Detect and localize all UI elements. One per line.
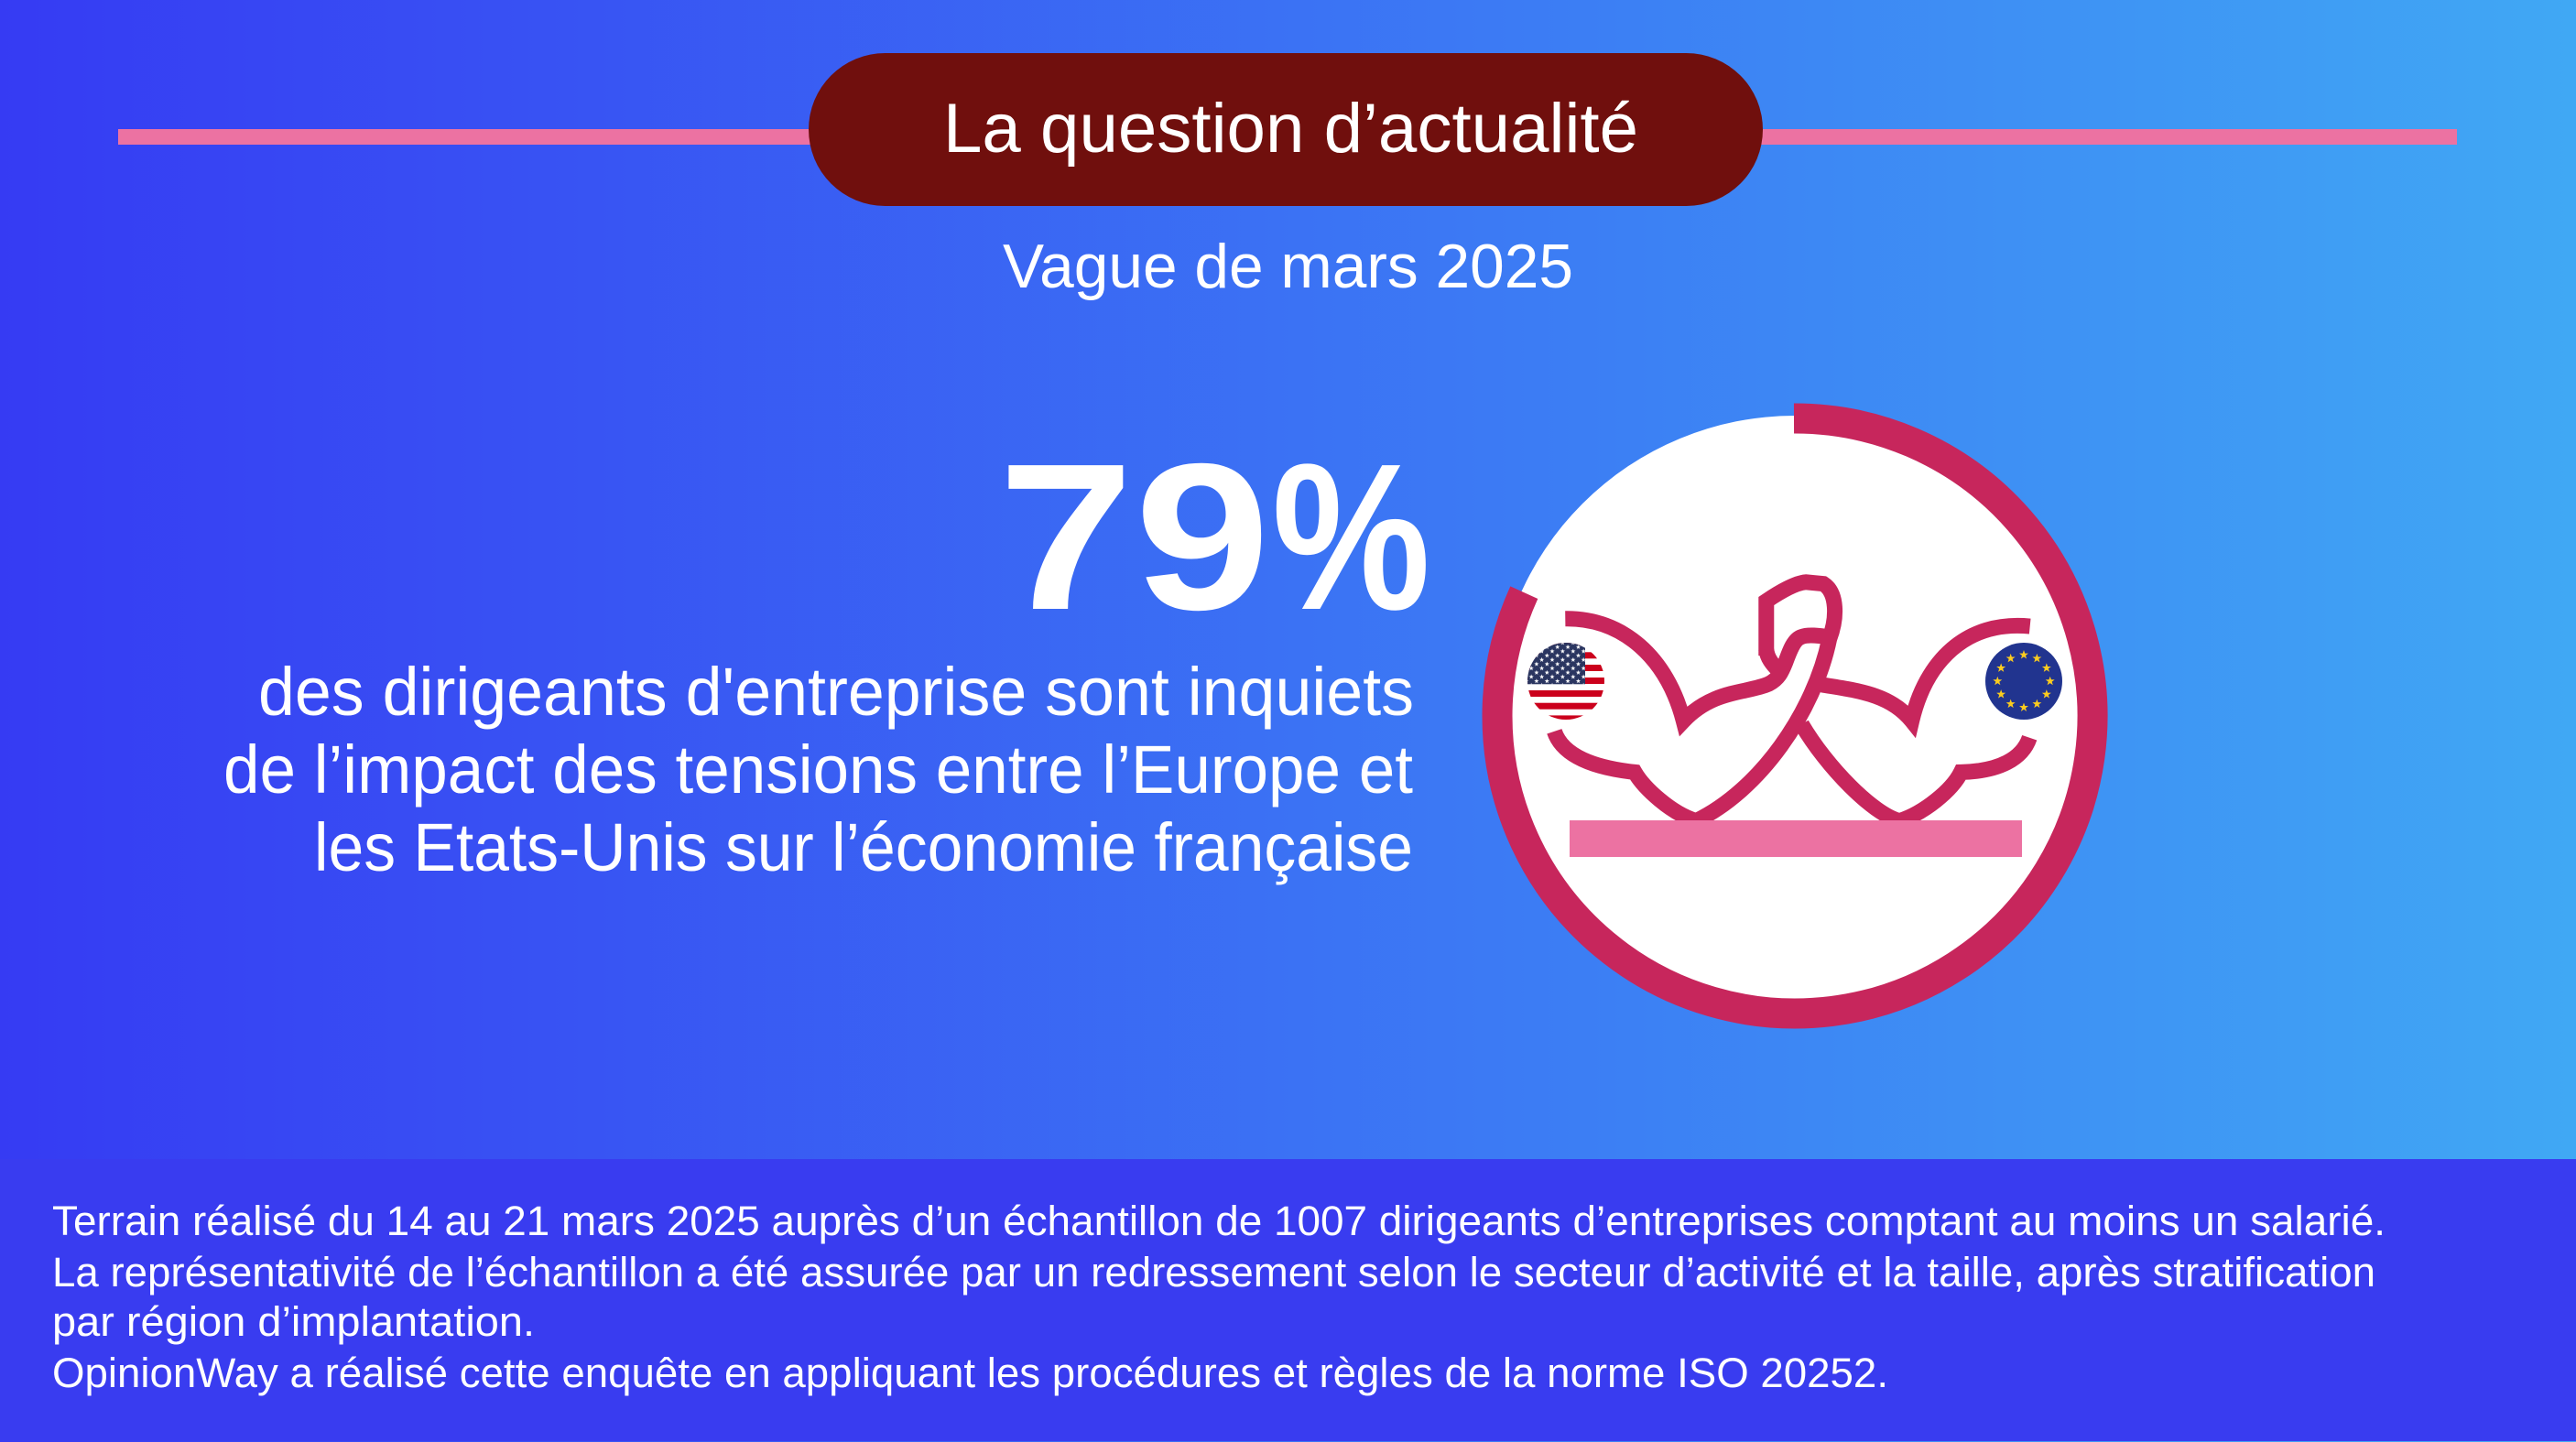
methodology text: Terrain réalisé du 14 au 21 mars 2025 auprès d’un échantillon de 1007 dirigeants d’entreprises comptant au moins un salarié. [52,1198,2386,1244]
table bar [1570,820,2022,857]
big number 79%: % [1272,421,1430,654]
statement text: de l’impact des tensions entre l’Europe et [223,732,1413,808]
donut chart with arm-wrestling icon [1495,416,2095,1016]
methodology text: OpinionWay a réalisé cette enquête en appliquant les procédures et règles de la norme ISO 20252. [52,1350,1888,1396]
icon: arm wrestling [1554,582,2030,821]
big number 79%: 7 [998,421,1134,654]
footer panel [0,1159,2576,1441]
methodology text [52,1198,2386,1396]
methodology text: par région d’implantation. [52,1298,535,1345]
icon: EU flag [1985,643,2062,720]
big number 79%: 9 [1135,421,1270,654]
header rule: right [1758,129,2457,145]
subtitle: Vague de mars 2025 [1003,232,1573,301]
white disc [1495,416,2095,1016]
statement text: des dirigeants d'entreprise sont inquiets [258,654,1414,730]
statement text [223,654,1414,885]
title pill [809,53,1763,206]
statement text: les Etats-Unis sur l’économie française [314,809,1413,885]
title text: La question d’actualité [943,90,1638,168]
icon: US flag [1527,640,1604,721]
big number 79% [998,421,1430,654]
79% ring arc [1497,418,2092,1014]
methodology text: La représentativité de l’échantillon a été assurée par un redressement selon le secteur d’activité et la taille, après stratification [52,1249,2375,1296]
header rule: left [118,129,814,145]
